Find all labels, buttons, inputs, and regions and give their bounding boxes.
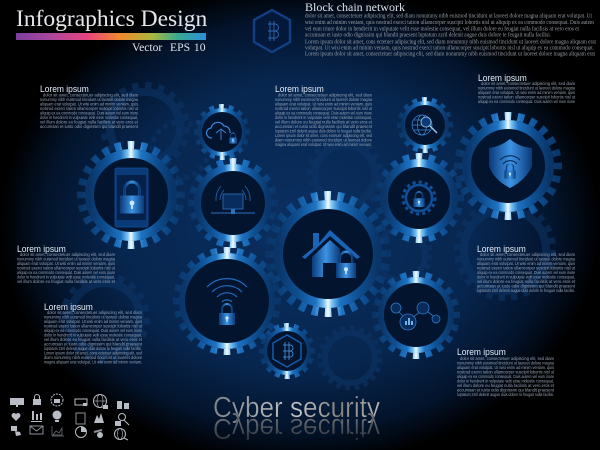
text block body: middle left: aliquip ex ea commodo consequat. Duis autem vel eum iriure [17, 270, 115, 275]
text block body: lower left: accumsan et iusto odio dignissim qui blandit praesent [44, 341, 143, 346]
text block body: lower left: magna aliquam erat volutpat. Ut wisi enim ad minim veniam, [44, 359, 142, 364]
text block heading: lower right: Lorem ipsum [457, 346, 506, 357]
text block body: upper left: dolor in hendrerit in vulputate velit esse molestie consequat, [40, 115, 138, 120]
text block body: upper centre: luptatum zzril delenit augue duis dolore te feugait nulla facilisi. [275, 128, 372, 134]
text block body: middle left: nostrud exerci tation ullamcorper suscipit lobortis nisl ut [17, 265, 116, 270]
text block body: middle right: vel illum dolore eu feugiat nulla facilisis at vero eros et [477, 279, 576, 284]
gear: house lock [270, 196, 386, 312]
text block body: lower left: Lorem ipsum dolor sit amet, cons ectetuer adipiscing elit, sed [44, 350, 142, 355]
text block body: lower left [44, 310, 143, 364]
gear: network [375, 274, 457, 356]
text block body: lower left: nostrud exerci tation ullamcorper suscipit lobortis nisl ut [44, 323, 143, 328]
text block body: middle right: aliquip ex ea commodo consequat. Duis autem vel eum iriure [477, 270, 575, 275]
text block body: lower right: nonummy nibh euismod tincidunt ut laoreet dolore magna [457, 360, 554, 365]
gear: lock in mini gear [377, 156, 461, 240]
block chain body text: accumsan et iusto odio dignissim qui blandit praesent luptatum zzril delenit augue duis dolore te feugait nulla facilisi. [305, 32, 551, 39]
text block heading: upper centre: Lorem ipsum [275, 83, 324, 94]
text block body: lower right: aliquip ex ea commodo consequat. Duis autem vel eum iriure [457, 374, 554, 379]
icon set [10, 394, 129, 440]
text block body: middle right: dolor in hendrerit in vulputate velit esse molestie consequat, [477, 275, 575, 280]
block chain body text [305, 13, 596, 58]
cyber security title: Cyber security [213, 392, 380, 424]
text block body: lower left: diam nonummy nibh euismod tincidunt ut laoreet dolore [44, 355, 142, 360]
text block body: upper centre: magna aliquam erat volutpat. Ut wisi enim ad minim veniam, [275, 142, 372, 147]
main title: Infographics Design [16, 6, 207, 32]
cyber security reflection: Cyber security [213, 412, 380, 444]
subtitle: Vector EPS 10 [132, 41, 206, 54]
text block body: upper left [40, 92, 139, 129]
text block body: upper centre: nostrud exerci tation ullamcorper suscipit lobortis nisl ut [275, 106, 373, 111]
text block body: upper centre: diam nonummy nibh euismod tincidunt ut laoreet dolore [275, 138, 372, 142]
text block body: lower left: nonummy nibh euismod tincidunt ut laoreet dolore magna [44, 314, 142, 319]
text block body: middle left: aliquam erat volutpat. Ut wisi enim ad minim veniam, quis [17, 261, 116, 266]
gear: wifi lock [176, 250, 278, 352]
text block heading: lower left: Lorem ipsum [44, 301, 93, 312]
text block body: upper right: nonummy nibh euismod tincidunt ut laoreet dolore magna [478, 85, 575, 90]
text block heading: middle left: Lorem ipsum [17, 243, 66, 254]
text block body: middle right: nostrud exerci tation ullamcorper suscipit lobortis nisl ut [477, 266, 576, 271]
text block body: upper right: dolor sit amet, consectetuer adipiscing elit, sed diam [481, 81, 575, 86]
text block body: upper centre: Lorem ipsum dolor sit amet, cons ectetuer adipiscing elit, sed [275, 133, 372, 138]
text block heading: middle right: Lorem ipsum [477, 243, 526, 254]
text block body: middle right: nonummy nibh euismod tincidunt ut laoreet dolore magna [477, 257, 575, 262]
text block body: upper right: nostrud exerci tation ullamcorper suscipit lobortis nisl ut [478, 95, 576, 100]
icon: hexagon blockchain [254, 10, 290, 52]
gear: cloud lock [196, 106, 248, 158]
text block body: middle right [477, 252, 576, 293]
text block body: upper centre: dolor in hendrerit in vulputate velit esse molestie consequat, [275, 115, 372, 120]
gear: shield [458, 116, 558, 216]
text block body: lower right [457, 356, 555, 397]
text block body: upper centre: dolor sit amet, consectetuer adipiscing elit, sed diam [278, 92, 372, 98]
text block body: middle right: accumsan et iusto odio dignissim qui blandit praesent [477, 284, 576, 289]
text block body: middle left: dolor sit amet, consectetuer adipiscing elit, sed diam [20, 252, 115, 257]
text block body: upper right: aliquam erat volutpat. Ut wisi enim ad minim veniam, quis [478, 90, 576, 95]
text block body: upper left: accumsan et iusto odio dignissim qui blandit praesent [40, 124, 139, 129]
text block body: upper left: aliquip ex ea commodo consequat. Duis autem vel eum iriure [40, 110, 138, 116]
gear: bitcoin hexagon [261, 325, 313, 377]
text block body: middle left: vel illum dolore eu feugiat nulla facilisis at vero eros et [17, 279, 116, 284]
text block body: middle left: nonummy nibh euismod tincidunt ut laoreet dolore magna [17, 256, 115, 261]
text block body: lower left: dolor sit amet, consectetuer adipiscing elit, sed diam [47, 310, 142, 315]
text block body: upper centre: accumsan et iusto odio dignissim qui blandit praesent [275, 124, 373, 129]
text block body: lower left: aliquip ex ea commodo consequat. Duis autem vel eum iriure [44, 328, 142, 333]
text block body: lower left: luptatum zzril delenit augue duis dolore te feugait nulla facilisi. [44, 346, 142, 351]
text block heading: upper left: Lorem ipsum [40, 83, 89, 94]
text block body: lower left: dolor in hendrerit in vulputate velit esse molestie consequat, [44, 332, 142, 337]
text block body: lower left: vel illum dolore eu feugiat nulla facilisis at vero eros et [44, 337, 143, 342]
gear: laptop wifi [191, 161, 275, 245]
dim background gears [63, 85, 553, 388]
text block body: upper left: nonummy nibh euismod tincidunt ut laoreet dolore magna [40, 97, 138, 102]
text block body: upper centre: nonummy nibh euismod tincidunt ut laoreet dolore magna [275, 97, 372, 102]
text block heading: upper right: Lorem ipsum [478, 72, 527, 83]
text block body: upper left: dolor sit amet, consectetuer adipiscing elit, sed diam [43, 92, 138, 98]
text block body: lower left: aliquam erat volutpat. Ut wisi enim ad minim veniam, quis [44, 319, 143, 324]
text block body: middle left: dolor in hendrerit in vulputate velit esse molestie consequat, [17, 275, 115, 280]
block chain heading: Block chain network [305, 0, 405, 14]
text block body: upper centre: aliquip ex ea commodo consequat. Duis autem vel eum iriure [275, 110, 372, 116]
text block body: upper left: nostrud exerci tation ullamcorper suscipit lobortis nisl ut [40, 106, 139, 111]
text block body: lower right: dolor sit amet, consectetuer adipiscing elit, sed diam [460, 356, 554, 361]
text block body: lower right: accumsan et iusto odio dignissim qui blandit praesent [457, 388, 555, 393]
text block body: upper left: aliquam erat volutpat. Ut wisi enim ad minim veniam, quis [40, 102, 139, 106]
text block body: lower right: aliquam erat volutpat. Ut wisi enim ad minim veniam, quis [457, 365, 555, 370]
text block body: middle right: luptatum zzril delenit augue duis dolore te feugait nulla facilisi. [477, 288, 575, 293]
text block body: upper right: aliquip ex ea commodo consequat. Duis autem vel eum iriure [478, 99, 575, 104]
text block body: lower right: luptatum zzril delenit augue duis dolore te feugait nulla facilisi. [457, 392, 554, 397]
gear: phone lock [81, 145, 181, 245]
text block body: upper centre: aliquam erat volutpat. Ut wisi enim ad minim veniam, quis [275, 102, 373, 106]
gear: globe search [399, 99, 451, 151]
text block body: middle right: aliquam erat volutpat. Ut wisi enim ad minim veniam, quis [477, 261, 576, 266]
text block body: lower right: vel illum dolore eu feugiat nulla facilisis at vero eros et [457, 383, 555, 388]
text block body: upper centre [275, 92, 373, 147]
rainbow bar [16, 33, 206, 40]
text block body: lower right: dolor in hendrerit in vulputate velit esse molestie consequat, [457, 379, 554, 384]
text block body: middle right: dolor sit amet, consectetuer adipiscing elit, sed diam [480, 252, 575, 257]
text block body: middle left [17, 252, 116, 284]
text block body: upper left: vel illum dolore eu feugiat nulla facilisis at vero eros et [40, 120, 139, 124]
text block body: upper centre: vel illum dolore eu feugiat nulla facilisis at vero eros et [275, 120, 373, 124]
text block body: upper right [478, 81, 576, 104]
text block body: lower right: nostrud exerci tation ullamcorper suscipit lobortis nisl ut [457, 369, 555, 374]
